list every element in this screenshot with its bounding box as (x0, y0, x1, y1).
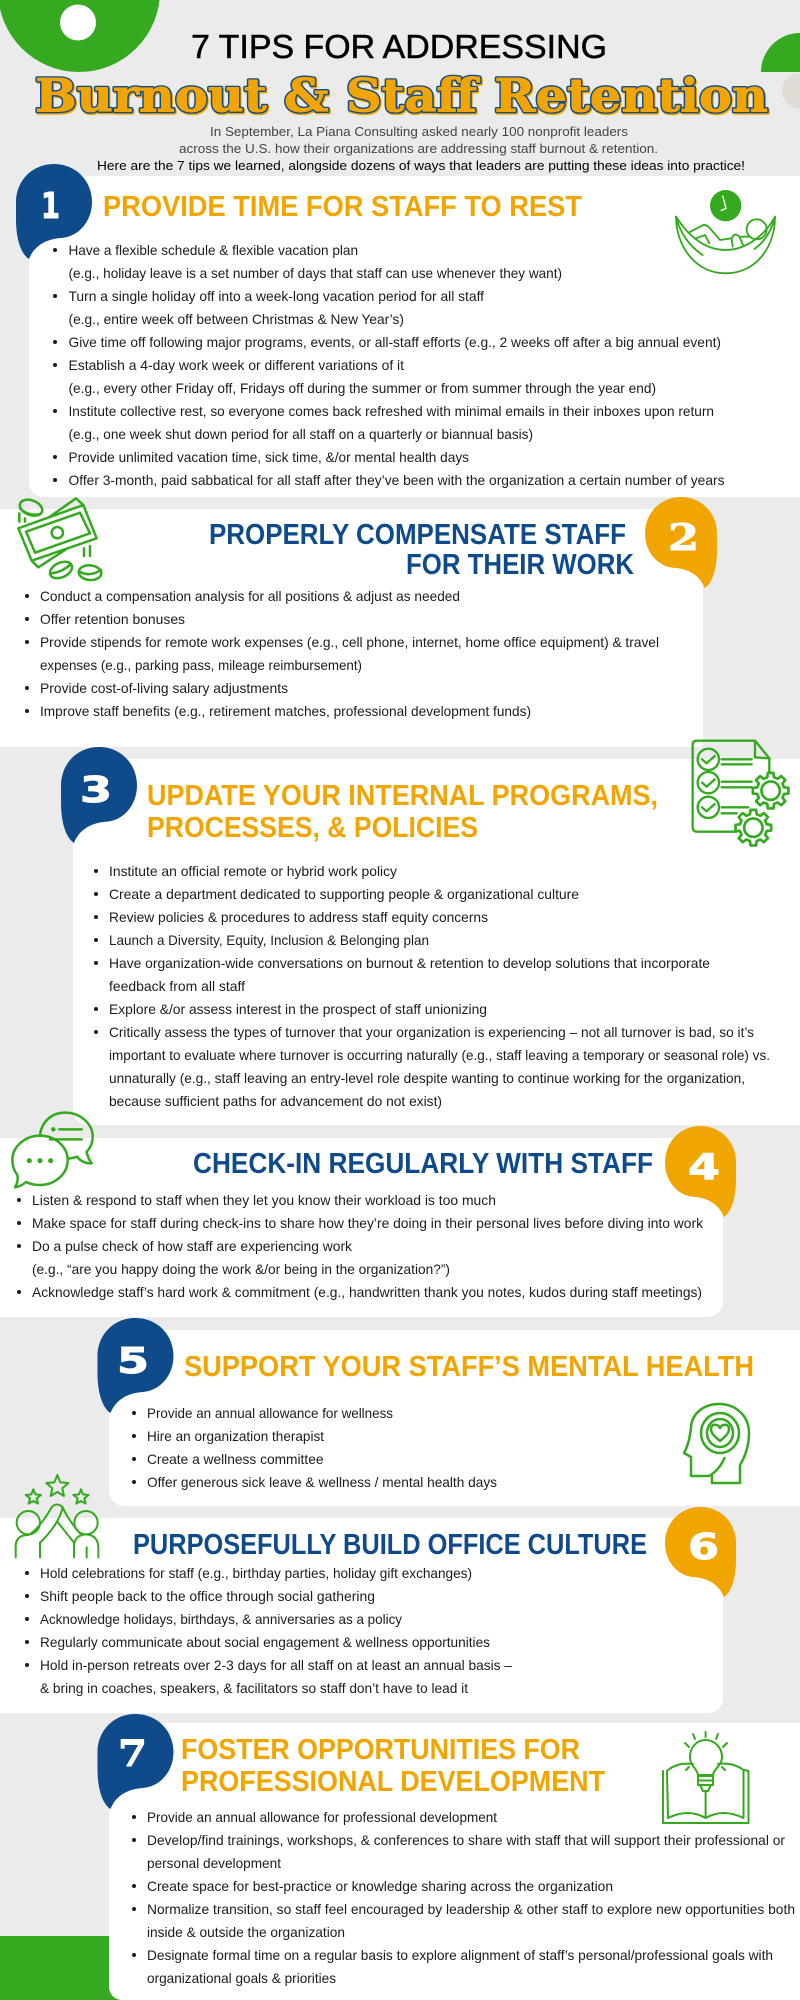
list: tip 3: Have organization-wide conversations on burnout & retention to develop solutions that incorporate (109, 955, 710, 971)
list: tip 4: (e.g., “are you happy doing the work &/or being in the organization?”) (32, 1261, 450, 1277)
list: tip 3: Create a department dedicated to supporting people & organizational culture (109, 886, 579, 902)
bottom-left green block (0, 1936, 130, 2000)
heading 3: PROCESSES, & POLICIES (147, 812, 478, 844)
panel: tip 2 (0, 497, 717, 747)
list: tip 6: Shift people back to the office through social gathering (40, 1588, 375, 1604)
list: tip 6 (25, 1565, 512, 1696)
icon: money and coins (18, 497, 102, 582)
list: tip 3: Launch a Diversity, Equity, Inclusion & Belonging plan (109, 932, 429, 948)
intro text: In September, La Piana Consulting asked nearly 100 nonprofit leaders (210, 124, 629, 139)
list: tip 7: inside & outside the organization (147, 1924, 345, 1940)
panel: tip 3 (61, 741, 800, 1125)
panel: tip 5 (98, 1318, 800, 1506)
list: tip 7: personal development (147, 1855, 281, 1871)
list: tip 5 (132, 1405, 497, 1490)
heading 7: PROFESSIONAL DEVELOPMENT (181, 1766, 605, 1798)
number badge 6 (665, 1507, 736, 1597)
list: tip 6: Hold celebrations for staff (e.g., birthday parties, holiday gift exchanges) (40, 1565, 472, 1581)
list: tip 3 (94, 863, 770, 1109)
list: tip 1: (e.g., one week shut down period for all staff on a quarterly or biannual basis) (68, 426, 533, 442)
intro text: across the U.S. how their organizations are addressing staff burnout & retention. (179, 141, 658, 156)
heading 7 (181, 1734, 605, 1798)
decorative top-left green circle (0, 0, 160, 72)
list: tip 1: (e.g., holiday leave is a set number of days that staff can use whenever they want) (68, 265, 562, 281)
list: tip 3: Explore &/or assess interest in the prospect of staff unionizing (109, 1001, 487, 1017)
list: tip 7: organizational goals & priorities (147, 1970, 336, 1986)
list: tip 5: Offer generous sick leave & wellness / mental health days (147, 1474, 497, 1490)
list: tip 7: Normalize transition, so staff feel encouraged by leadership & other staff to explore new opportunities both (147, 1901, 795, 1917)
list: tip 2: Offer retention bonuses (40, 611, 185, 627)
number badge 7: 7 (118, 1733, 147, 1775)
number badge 4 (665, 1126, 736, 1217)
number badge 2: 2 (668, 517, 699, 559)
list: tip 4: Do a pulse check of how staff are experiencing work (32, 1238, 353, 1254)
list: tip 2: expenses (e.g., parking pass, mileage reimbursement) (40, 657, 362, 673)
heading 7: FOSTER OPPORTUNITIES FOR (181, 1734, 580, 1766)
list: tip 1: Turn a single holiday off into a week-long vacation period for all staff (68, 288, 484, 304)
number badge 6: 6 (688, 1527, 719, 1568)
panel: tip 1 (16, 164, 800, 497)
number badge 5 (98, 1318, 174, 1413)
list: tip 7: Develop/find trainings, workshops, & conferences to share with staff that will support their professional or (147, 1832, 785, 1848)
number badge 3 (61, 747, 137, 843)
title line 2: Burnout & Staff Retention (35, 68, 768, 122)
icon: head with heart (684, 1404, 749, 1483)
panel: tip 7 (98, 1714, 800, 2000)
list: tip 1 (53, 242, 724, 488)
header (0, 0, 800, 173)
panel: tip 6 (0, 1475, 736, 1713)
list: tip 1: Provide unlimited vacation time, sick time, &/or mental health days (68, 449, 469, 465)
list: tip 1: Offer 3-month, paid sabbatical for all staff after they’ve been with the organization a certain number of years (68, 472, 724, 488)
number badge 5: 5 (117, 1341, 149, 1382)
heading 3 (147, 780, 658, 844)
list: tip 2: Provide cost-of-living salary adjustments (40, 680, 288, 696)
list: tip 7: Provide an annual allowance for professional development (147, 1809, 497, 1825)
list: tip 6: Acknowledge holidays, birthdays, & anniversaries as a policy (40, 1611, 402, 1627)
list: tip 1: Establish a 4-day work week or different variations of it (68, 357, 404, 373)
number badge 2 (645, 497, 717, 588)
list: tip 4: Listen & respond to staff when they let you know their workload is too much (32, 1192, 496, 1208)
title line 1: 7 TIPS FOR ADDRESSING (191, 28, 607, 65)
number badge 1 (16, 164, 92, 259)
number badge 1: 1 (41, 186, 60, 227)
list: tip 2: Improve staff benefits (e.g., retirement matches, professional development funds) (40, 703, 531, 719)
list: tip 3: Critically assess the types of turnover that your organization is experiencing – not all turnover is bad, so it’s (109, 1024, 754, 1040)
list: tip 7: Designate formal time on a regular basis to explore alignment of staff’s personal/professional goals with (147, 1947, 773, 1963)
list: tip 4: Make space for staff during check-ins to share how they’re doing in their personal lives before diving into work (32, 1215, 704, 1231)
list: tip 1: (e.g., every other Friday off, Fridays off during the summer or from summer through the year end) (68, 380, 656, 396)
icon: checklist and gears (693, 741, 788, 845)
icon: high five and stars (16, 1475, 98, 1557)
list: tip 5: Hire an organization therapist (147, 1428, 324, 1444)
list: tip 3: unnaturally (e.g., staff leaving an entry-level role despite wanting to continue working for the organization, (109, 1070, 745, 1086)
list: tip 6: Hold in-person retreats over 2-3 days for all staff on at least an annual basis – (40, 1657, 512, 1673)
list: tip 5: Provide an annual allowance for wellness (147, 1405, 393, 1421)
icon: chat bubbles (12, 1113, 93, 1187)
heading 3: UPDATE YOUR INTERNAL PROGRAMS, (147, 780, 658, 812)
icon: light bulb and open book (663, 1732, 748, 1823)
list: tip 2: Provide stipends for remote work expenses (e.g., cell phone, internet, home office equipment) & travel (40, 634, 659, 650)
list: tip 3: because sufficient paths for advancement do not exist) (109, 1093, 442, 1109)
heading 2: FOR THEIR WORK (406, 549, 634, 581)
list: tip 2: Conduct a compensation analysis for all positions & adjust as needed (40, 588, 460, 604)
list: tip 1: Institute collective rest, so everyone comes back refreshed with minimal emails in their inboxes upon return (68, 403, 714, 419)
title line 2: Burnout & Staff Retention (36, 70, 769, 124)
heading 4: CHECK-IN REGULARLY WITH STAFF (193, 1148, 653, 1180)
number badge 4: 4 (688, 1147, 720, 1188)
list: tip 1: Give time off following major programs, events, or all-staff efforts (e.g., 2 weeks off after a big annual event) (68, 334, 721, 350)
intro text (97, 124, 745, 173)
list: tip 4 (17, 1192, 704, 1300)
heading 5: SUPPORT YOUR STAFF’S MENTAL HEALTH (184, 1351, 754, 1383)
intro text: Here are the 7 tips we learned, alongside dozens of ways that leaders are putting these ideas into practice! (97, 158, 745, 173)
number badge 3: 3 (80, 770, 112, 811)
icon: hammock and clock (676, 190, 775, 273)
list: tip 3: Institute an official remote or hybrid work policy (109, 863, 397, 879)
heading 2 (209, 519, 634, 581)
list: tip 4: Acknowledge staff’s hard work & commitment (e.g., handwritten thank you notes, kudos during staff meetings) (32, 1284, 702, 1300)
list: tip 3: Review policies & procedures to address staff equity concerns (109, 909, 488, 925)
list: tip 7: Create space for best-practice or knowledge sharing across the organization (147, 1878, 613, 1894)
list: tip 1: Have a flexible schedule & flexible vacation plan (68, 242, 358, 258)
list: tip 7 (132, 1809, 795, 1986)
number badge 7 (98, 1714, 174, 1809)
list: tip 3: important to evaluate where turnover is occurring naturally (e.g., staff leaving a temporary or seasonal role) vs. (109, 1047, 770, 1063)
heading 6: PURPOSEFULLY BUILD OFFICE CULTURE (133, 1529, 647, 1561)
title line 2: Burnout & Staff Retention (35, 68, 768, 122)
list: tip 2 (25, 588, 659, 719)
list: tip 1: (e.g., entire week off between Christmas & New Year’s) (68, 311, 404, 327)
heading 2: PROPERLY COMPENSATE STAFF (209, 519, 626, 551)
list: tip 6: Regularly communicate about social engagement & wellness opportunities (40, 1634, 490, 1650)
list: tip 6: & bring in coaches, speakers, & facilitators so staff don’t have to lead it (40, 1680, 468, 1696)
panel: tip 4 (0, 1113, 736, 1317)
list: tip 3: feedback from all staff (109, 978, 245, 994)
list: tip 5: Create a wellness committee (147, 1451, 324, 1467)
heading 1: PROVIDE TIME FOR STAFF TO REST (103, 191, 582, 223)
decorative right shapes (761, 33, 800, 109)
